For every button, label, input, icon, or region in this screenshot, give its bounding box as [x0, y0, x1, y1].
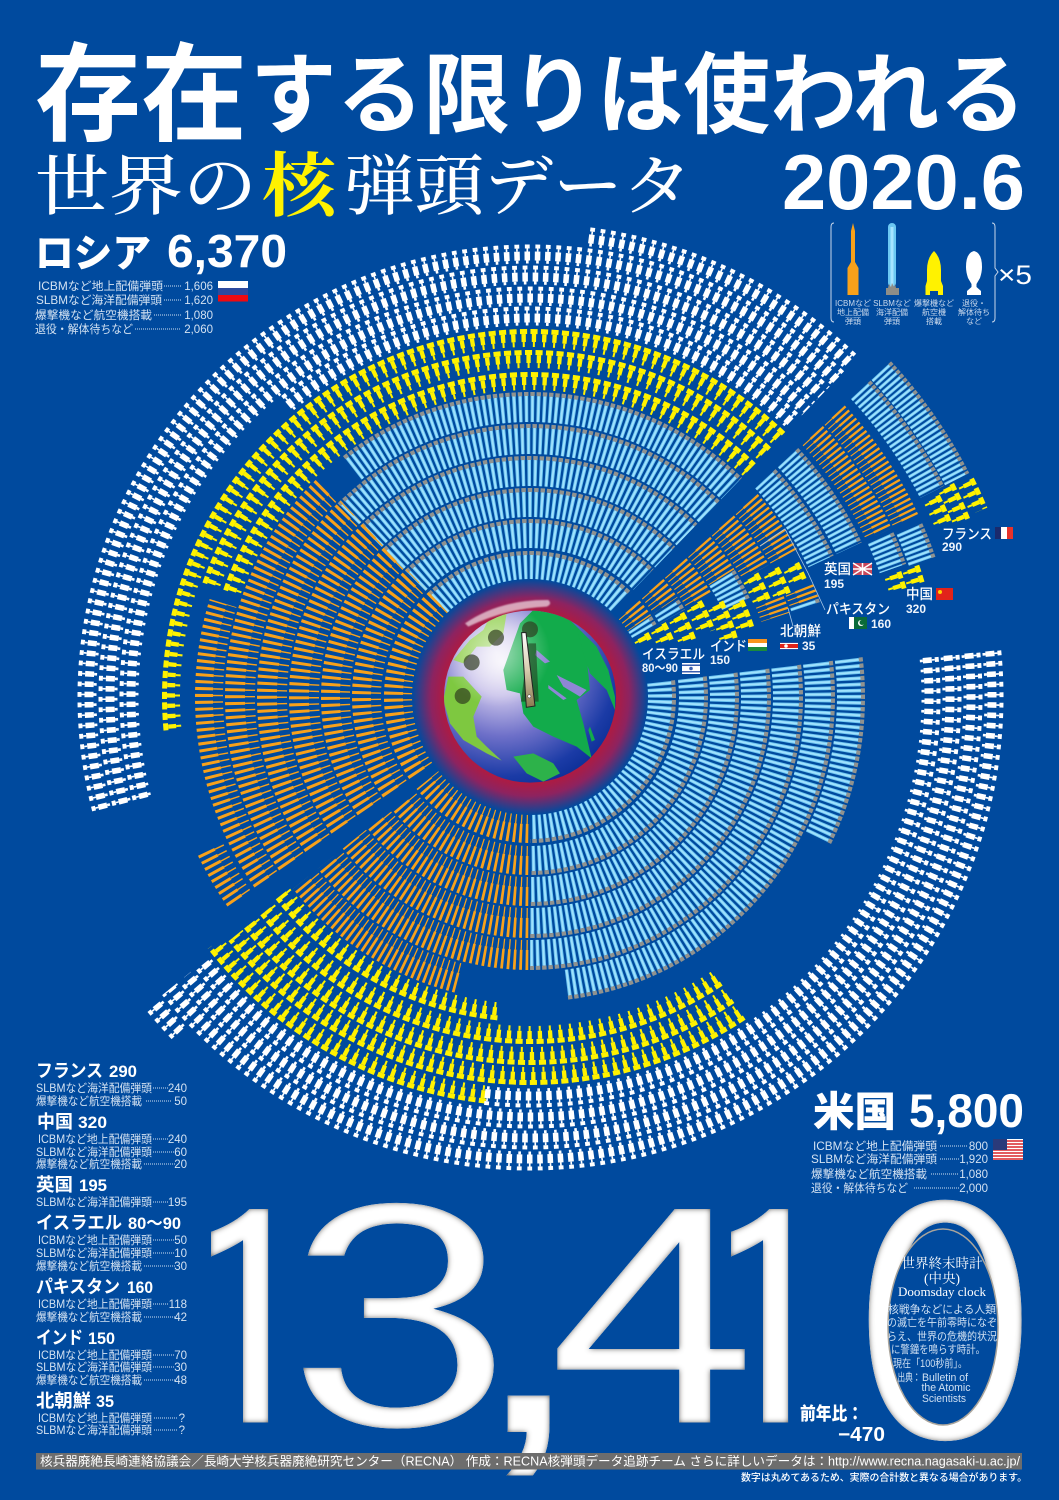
label: UK: 英国 — [824, 561, 851, 577]
Israel list: 50 — [174, 1235, 187, 1247]
subtitle — [35, 149, 692, 226]
panel: US totals: 爆撃機など航空機搭載 — [811, 1167, 928, 1181]
Israel list — [36, 1213, 187, 1273]
legend: warhead types x5: 弾頭 — [884, 316, 900, 326]
label: France: フランス — [942, 526, 992, 542]
label: North Korea — [780, 623, 821, 653]
change from previous year: 前年比： — [800, 1403, 863, 1424]
panel: US totals: 800 — [969, 1141, 988, 1153]
France list: SLBMなど海洋配備弾頭 — [36, 1081, 152, 1095]
multiplier: ×5 — [998, 260, 1032, 290]
North Korea list: SLBMなど海洋配備弾頭 — [36, 1423, 152, 1437]
icon: retired warhead — [966, 251, 982, 295]
panel: US totals — [811, 1084, 1024, 1195]
US SLBM rings — [530, 657, 865, 1000]
panel: Russia totals: 2,060 — [184, 324, 213, 336]
Russia retired rings — [78, 227, 856, 812]
legend: warhead types x5: など — [966, 317, 982, 326]
title: 存在 — [35, 35, 247, 155]
North Korea list: ? — [179, 1425, 185, 1437]
text: doomsday clock explanation: に警鐘を鳴らす時計。 — [891, 1343, 985, 1356]
heading: Russia: ロシア — [35, 233, 151, 276]
label: China: 中国 — [906, 586, 933, 602]
panel: Russia totals: SLBMなど海洋配備弾頭 — [36, 293, 162, 307]
France list: フランス — [36, 1061, 103, 1081]
Pakistan list: 118 — [169, 1299, 187, 1311]
text: doomsday clock explanation: の滅亡を午前零時になぞ — [887, 1316, 997, 1329]
panel: Russia totals: 1,080 — [184, 310, 213, 322]
text: doomsday clock explanation: らえ、世界の危機的状況 — [887, 1330, 997, 1343]
India rings — [665, 536, 754, 640]
legend: warhead types x5: 海洋配備 — [876, 307, 908, 317]
change from previous year — [800, 1403, 885, 1446]
chart: radial warhead rings — [78, 227, 1004, 1170]
counter of the zero — [888, 1229, 998, 1425]
label: India: 150 — [710, 653, 730, 667]
China list: 爆撃機など航空機搭載 — [36, 1157, 142, 1171]
panel: US totals: SLBMなど海洋配備弾頭 — [811, 1152, 937, 1166]
label: Israel: 80～90 — [642, 661, 678, 675]
Israel list: ICBMなど地上配備弾頭 — [38, 1234, 152, 1247]
footer credits bar: 核兵器廃絶長崎連絡協議会／長崎大学核兵器廃絶研究センター（RECNA） 作成：RECNA核弾頭データ追跡チーム さらに詳しいデータは：http://www.recna.nagasaki-u.ac.jp/ — [40, 1454, 1021, 1468]
text: doomsday clock explanation: 出典： — [898, 1371, 920, 1384]
Israel list: 10 — [174, 1248, 187, 1260]
subtitle: 世界の — [35, 151, 257, 224]
label: Pakistan — [826, 601, 891, 631]
icon: SLBM — [886, 223, 899, 295]
big total number: 4 — [547, 1170, 755, 1475]
UK list: 英国 — [36, 1174, 73, 1195]
panel: US totals: 2,000 — [959, 1183, 988, 1195]
Israel list: イスラエル — [36, 1213, 122, 1233]
North Korea list: ICBMなど地上配備弾頭 — [38, 1412, 152, 1425]
North Korea list — [36, 1391, 185, 1437]
label: China: 320 — [906, 602, 926, 616]
India list: 70 — [174, 1350, 187, 1362]
footnote: 数字は丸めてあるため、実際の合計数と異なる場合があります。 — [741, 1471, 1027, 1484]
Russia ICBM rings — [195, 480, 448, 906]
UK list: SLBMなど海洋配備弾頭 — [36, 1195, 152, 1209]
China list: ICBMなど地上配備弾頭 — [38, 1133, 152, 1146]
China rings — [802, 406, 936, 590]
label: Pakistan: パキスタン — [826, 601, 890, 617]
text: doomsday clock explanation — [887, 1255, 997, 1405]
Pakistan list: 爆撃機など航空機搭載 — [36, 1310, 142, 1324]
legend: warhead types x5: 地上配備 — [837, 307, 869, 317]
label: China — [906, 586, 953, 616]
text: doomsday clock explanation: (中央) — [924, 1270, 960, 1286]
legend: warhead types x5: 退役・ — [962, 299, 986, 308]
India list: 150 — [88, 1329, 115, 1348]
panel: Russia totals: ICBMなど地上配備弾頭 — [38, 280, 164, 293]
US retired rings — [148, 650, 1004, 1170]
UK list: 195 — [79, 1176, 107, 1195]
India list: 爆撃機など航空機搭載 — [36, 1373, 142, 1387]
big total number: 1 — [695, 1170, 848, 1475]
India list: インド — [36, 1328, 83, 1348]
panel: Russia totals: 1,606 — [184, 281, 213, 293]
panel: Russia totals — [35, 225, 287, 336]
panel: US totals: 1,080 — [959, 1169, 988, 1181]
UK list: 195 — [168, 1197, 187, 1209]
China list: 240 — [168, 1134, 187, 1146]
date: 2020.6 — [782, 138, 1025, 226]
India list: 48 — [174, 1375, 187, 1387]
India list: ICBMなど地上配備弾頭 — [38, 1349, 152, 1362]
change from previous year: −470 — [838, 1424, 885, 1446]
panel: Russia totals: 1,620 — [184, 295, 213, 307]
title: する限りは使われる — [250, 46, 1026, 145]
Russia bomber rings — [162, 329, 786, 731]
label: Israel: イスラエル — [642, 646, 705, 662]
China list: 60 — [174, 1147, 187, 1159]
label: North Korea: 北朝鮮 — [780, 623, 821, 639]
North Korea list: 北朝鮮 — [36, 1391, 91, 1411]
France list: 290 — [109, 1062, 137, 1081]
Pakistan list: パキスタン — [36, 1277, 120, 1297]
India list — [36, 1328, 187, 1387]
legend: warhead types x5: SLBMなど — [873, 299, 911, 308]
icon: clock hand — [522, 633, 535, 707]
number: Russia total: 6,370 — [167, 225, 287, 277]
panel: US totals: 1,920 — [959, 1154, 988, 1166]
number: US total: 5,800 — [909, 1084, 1024, 1137]
Pakistan list — [36, 1277, 187, 1324]
China list: 320 — [78, 1113, 107, 1132]
legend: warhead types x5: 搭載 — [926, 316, 942, 326]
panel: US totals: ICBMなど地上配備弾頭 — [813, 1140, 938, 1153]
panel: Russia totals: 退役・解体待ちなど — [35, 322, 133, 336]
Israel list: SLBMなど海洋配備弾頭 — [36, 1246, 152, 1260]
label leaders — [760, 529, 825, 626]
big total number — [175, 1068, 1038, 1500]
China list — [36, 1112, 187, 1171]
China list: SLBMなど海洋配備弾頭 — [36, 1145, 152, 1159]
subtitle: 弾頭データ — [345, 151, 692, 224]
label: North Korea: 35 — [802, 639, 816, 653]
Pakistan list: 160 — [127, 1278, 153, 1297]
North Korea list: 35 — [96, 1392, 114, 1411]
big total number: 3 — [284, 1170, 514, 1475]
label: France: 290 — [942, 540, 962, 554]
Israel list: 爆撃機など航空機搭載 — [36, 1259, 142, 1273]
heading: US: 米国 — [813, 1089, 896, 1135]
text: doomsday clock explanation: the Atomic — [922, 1382, 971, 1394]
text: doomsday clock explanation: 世界終末時計 — [902, 1255, 983, 1271]
label: UK — [824, 561, 872, 591]
Russia SLBM rings — [338, 392, 742, 612]
France list: 爆撃機など航空機搭載 — [36, 1094, 142, 1108]
US bomber rings — [208, 888, 746, 1104]
Pakistan list: 42 — [174, 1312, 187, 1324]
North Korea list: ? — [179, 1413, 185, 1425]
icon: ICBM — [848, 223, 858, 295]
India list: SLBMなど海洋配備弾頭 — [36, 1360, 152, 1374]
text: doomsday clock explanation: Scientists — [922, 1393, 966, 1405]
legend: warhead types x5: 航空機 — [922, 307, 946, 317]
text: doomsday clock explanation: 核戦争などによる人類 — [888, 1303, 996, 1316]
UK rings — [755, 448, 862, 568]
Israel list: 80～90 — [128, 1214, 181, 1233]
label: France — [942, 526, 1013, 554]
title — [35, 35, 1026, 155]
legend: warhead types x5: 解体待ち — [958, 307, 990, 317]
label: India: インド — [710, 638, 747, 654]
legend: warhead types x5: ICBMなど — [835, 299, 871, 308]
France list — [36, 1061, 187, 1108]
Pakistan rings — [712, 494, 806, 603]
UK list — [36, 1174, 187, 1209]
China list: 20 — [174, 1159, 187, 1171]
label: Israel — [642, 646, 705, 675]
North Korea rings — [756, 584, 820, 622]
US ICBM rings — [293, 771, 528, 992]
flag: US — [993, 1139, 1023, 1160]
panel: other nuclear states list — [36, 1061, 187, 1437]
France rings — [851, 361, 988, 525]
icon: bomber weapon — [926, 251, 943, 295]
France list: 50 — [174, 1096, 187, 1108]
China list: 中国 — [37, 1112, 73, 1132]
legend: warhead types x5: 弾頭 — [845, 316, 861, 326]
label: Pakistan: 160 — [871, 617, 891, 631]
icon: clock hand shadow — [521, 643, 539, 702]
panel: US totals: 退役・解体待ちなど — [811, 1181, 908, 1195]
globe with doomsday clock — [412, 579, 648, 815]
panel: Russia totals: 爆撃機など航空機搭載 — [35, 308, 153, 322]
text: doomsday clock explanation: Doomsday clock — [898, 1284, 986, 1299]
label: India — [710, 638, 767, 667]
big total number: 1 — [175, 1170, 328, 1475]
Israel list: 30 — [174, 1261, 187, 1273]
label: UK: 195 — [824, 577, 844, 591]
text: doomsday clock explanation: Bulletin of — [922, 1372, 968, 1384]
big total number: , — [467, 1125, 589, 1500]
legend: warhead types x5 — [831, 223, 1032, 326]
India list: 30 — [174, 1362, 187, 1374]
flag: Russia — [218, 281, 248, 302]
France list: 240 — [168, 1083, 187, 1095]
Israel rings — [618, 579, 696, 644]
legend: warhead types x5: 爆撃機など — [914, 298, 954, 308]
icon: clock dots — [455, 621, 538, 704]
Pakistan list: ICBMなど地上配備弾頭 — [38, 1298, 152, 1311]
text: doomsday clock explanation: 現在「100秒前」。 — [893, 1357, 967, 1370]
subtitle: 核 — [262, 149, 341, 226]
